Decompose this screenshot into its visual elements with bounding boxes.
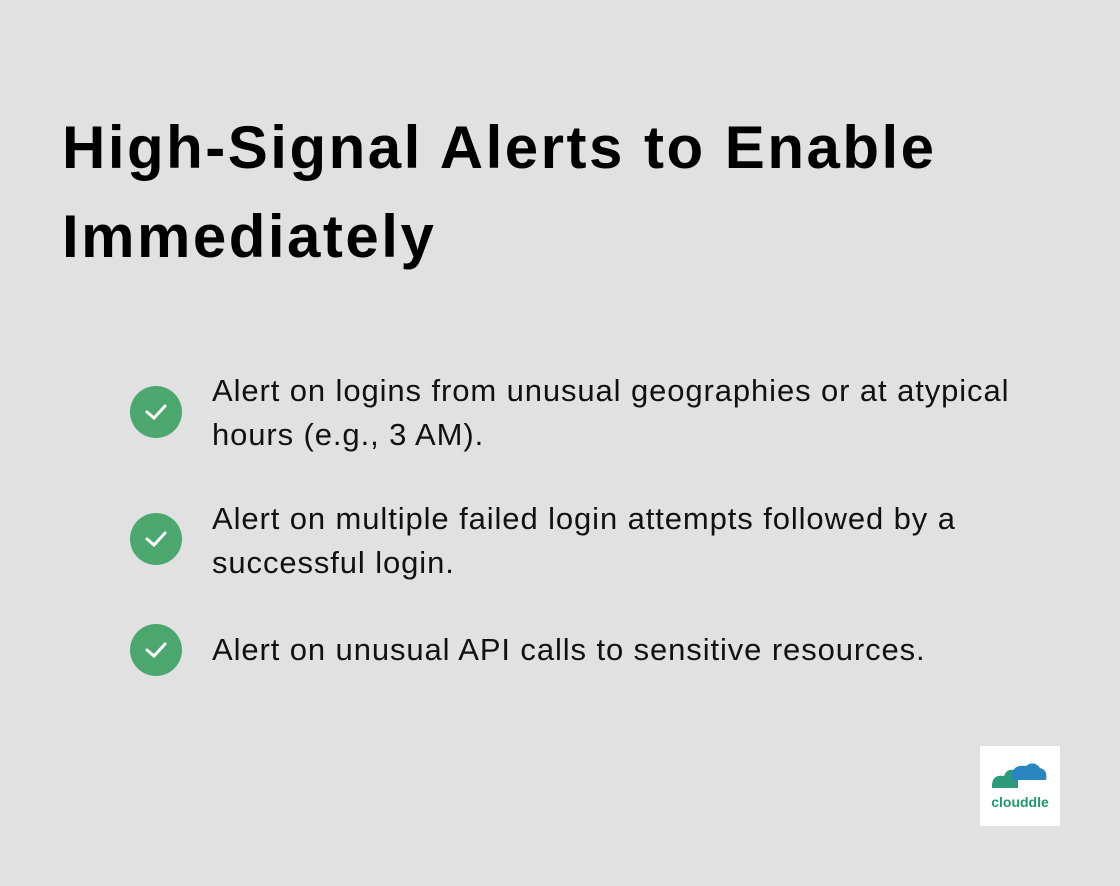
text 3: Alert on unusual API calls to sensitive resources.	[212, 632, 926, 667]
text 2	[212, 501, 956, 580]
text 1: hours (e.g., 3 AM).	[212, 417, 484, 452]
title	[62, 114, 937, 270]
title: Immediately	[62, 203, 436, 270]
logo	[980, 746, 1060, 826]
text 2: Alert on multiple failed login attempts followed by a	[212, 501, 956, 536]
icon: check	[130, 624, 182, 676]
text 1	[212, 373, 1009, 452]
item 3	[130, 624, 926, 676]
icon: check	[130, 513, 182, 565]
logo: clouddle	[991, 794, 1049, 810]
title: High-Signal Alerts to Enable	[62, 114, 937, 181]
text 2: successful login.	[212, 545, 455, 580]
item 2	[130, 501, 956, 580]
text 1: Alert on logins from unusual geographies or at atypical	[212, 373, 1009, 408]
item 1	[130, 373, 1009, 452]
icon: check	[130, 386, 182, 438]
